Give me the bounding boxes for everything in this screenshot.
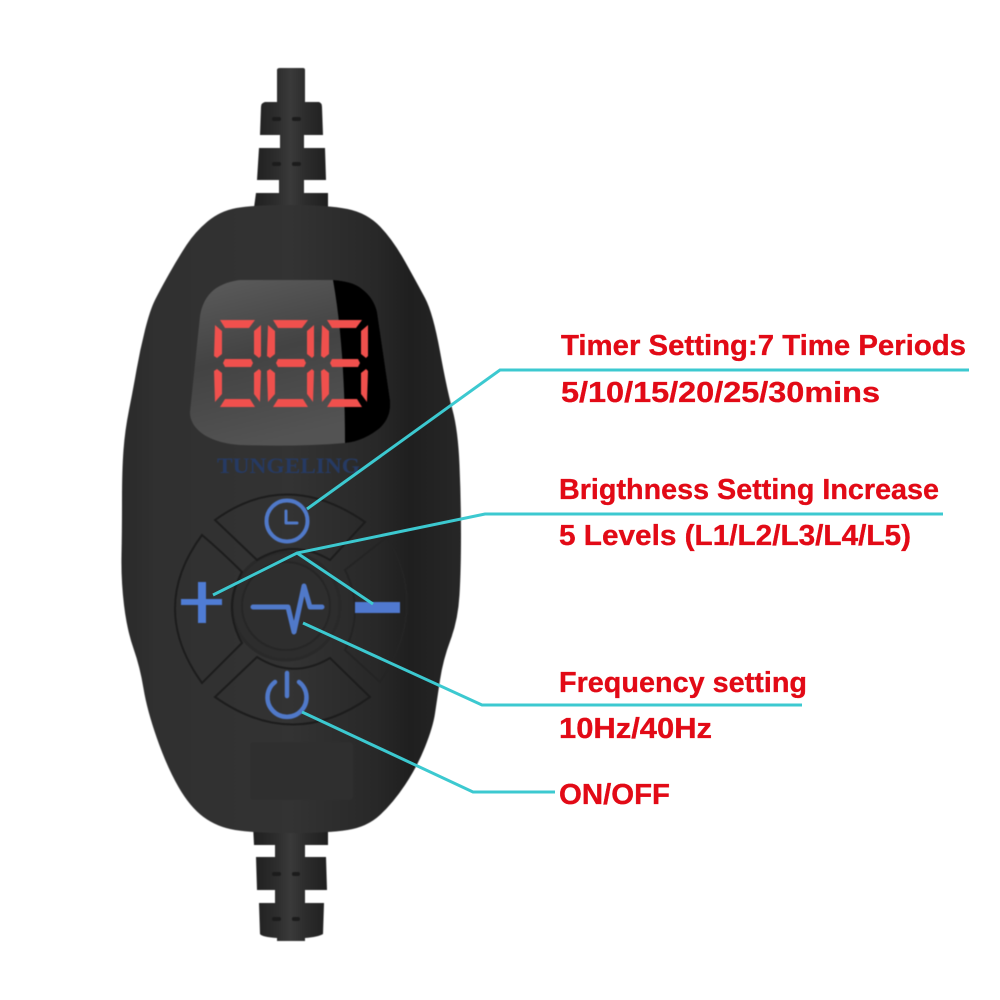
leader line: frequency [303,623,802,705]
label: frequency values: 10Hz/40Hz [559,713,712,745]
left button outline [175,535,242,683]
controller body [121,205,461,833]
label: brightness values: 5 Levels (L1/L2/L3/L4/L5) [559,520,911,552]
center button [232,552,340,660]
control wheel [175,494,407,724]
right button outline [345,537,407,682]
controller device [121,68,461,941]
label: timer heading: Timer Setting:7 Time Periods [561,330,966,362]
brand logo: TUNGELING [217,453,360,478]
bottom cable connector [253,825,328,941]
leader line: timer [307,370,969,509]
LED digits [214,320,368,407]
icon: minus [355,602,400,613]
connector grip marks top [274,119,300,164]
label: frequency heading: Frequency setting [559,667,807,699]
black glare on screen [333,280,390,443]
icon: power [268,673,307,717]
top cable connector [253,68,328,215]
icon: pulse [253,586,322,632]
bottom label patch [250,742,353,800]
label: brightness heading: Brigthness Setting Increase [559,474,939,506]
leader line: brightness decrease [297,553,373,604]
label: on/off: ON/OFF [559,779,670,811]
top button outline [215,494,365,560]
icon: clock [266,500,308,542]
bottom button outline [215,657,370,724]
icon: plus [181,582,222,623]
leader line: brightness increase [213,514,943,595]
leader line: on/off [302,712,555,792]
display screen [190,280,390,446]
label: timer values: 5/10/15/20/25/30mins [561,377,880,409]
connector grip marks bottom [274,874,298,919]
